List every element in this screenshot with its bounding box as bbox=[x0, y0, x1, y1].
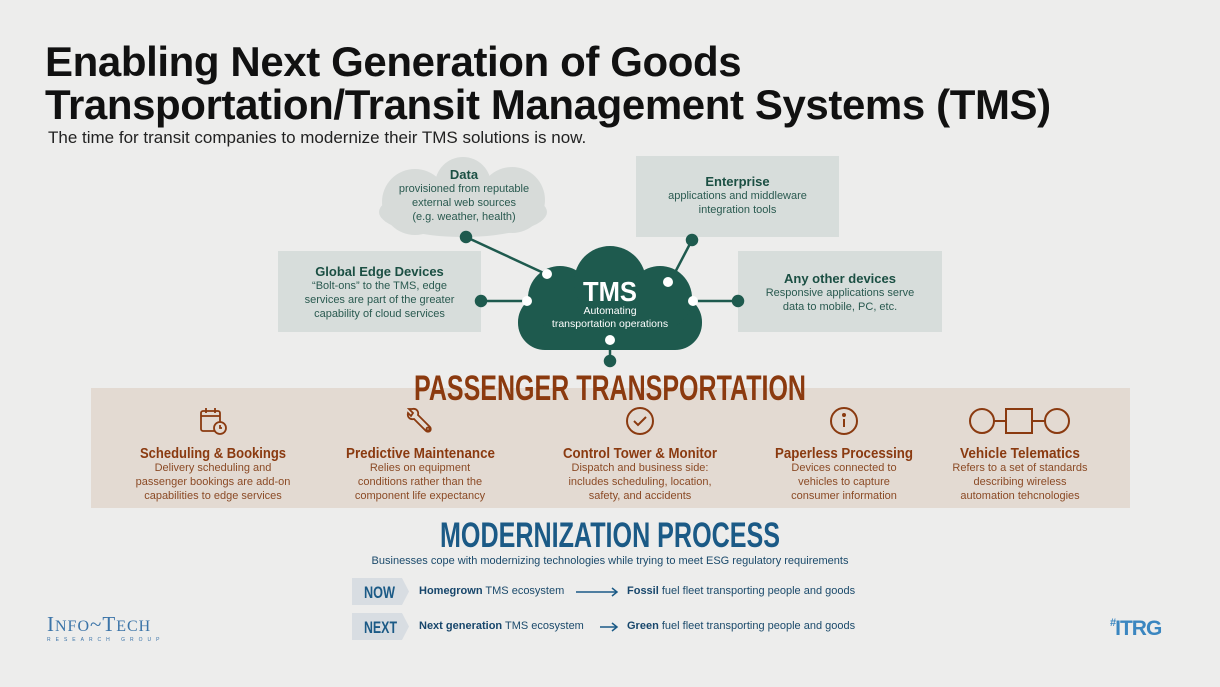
icon: check circle bbox=[626, 407, 654, 435]
text: Data: provisioned from reputable bbox=[399, 183, 529, 195]
column: paperless: consumer information bbox=[791, 490, 897, 502]
row: NEXT bbox=[352, 613, 855, 640]
box: Global Edge Devices: “Bolt-ons” to the TMS, edge bbox=[312, 280, 447, 292]
column: predictive maintenance: component life expectancy bbox=[355, 490, 485, 502]
icon: telematics bbox=[969, 408, 1070, 434]
subtitle: The time for transit companies to modernize their TMS solutions is now. bbox=[48, 128, 586, 147]
box: Global Edge Devices: services are part of the greater bbox=[305, 294, 454, 306]
logo: Info-Tech bbox=[47, 612, 165, 643]
cloud: TMS bbox=[518, 246, 702, 350]
text: Data: Data bbox=[450, 167, 478, 182]
text: Data: (e.g. weather, health) bbox=[412, 211, 516, 223]
box: Any other devices: Responsive applications serve bbox=[766, 287, 914, 299]
row: NOW: NOW bbox=[364, 583, 396, 602]
box: Any other devices: data to mobile, PC, etc. bbox=[783, 301, 897, 313]
box: Global Edge Devices bbox=[278, 251, 481, 332]
box: Global Edge Devices: capability of cloud services bbox=[314, 308, 445, 320]
diagram: TMS hub: TMS bbox=[583, 276, 637, 307]
column: telematics bbox=[952, 408, 1088, 502]
text: Data bbox=[399, 167, 529, 223]
column: telematics: describing wireless bbox=[974, 476, 1066, 488]
icon: wrench bbox=[406, 408, 432, 433]
icon: calendar bbox=[200, 408, 227, 435]
column: telematics: Refers to a set of standards bbox=[952, 462, 1088, 474]
column: predictive maintenance: Relies on equipment bbox=[370, 462, 470, 474]
column: control tower: includes scheduling, location, bbox=[568, 476, 712, 488]
icon: info bbox=[830, 407, 858, 435]
box: Any other devices bbox=[738, 251, 942, 332]
logo: Info-Tech: INFO~TECH bbox=[47, 612, 151, 636]
box: Any other devices: Any other devices bbox=[784, 271, 896, 286]
column: predictive maintenance: conditions rather than the bbox=[358, 476, 482, 488]
title: Transportation/Transit Management Systems (TMS) bbox=[45, 81, 1051, 128]
row: NOW bbox=[352, 578, 855, 605]
column: scheduling bbox=[136, 408, 290, 502]
box: Enterprise: Enterprise bbox=[705, 174, 770, 189]
title bbox=[45, 38, 1051, 128]
box: Enterprise: applications and middleware bbox=[668, 190, 807, 202]
diagram: TMS hub bbox=[379, 157, 744, 368]
column: control tower bbox=[563, 407, 717, 502]
connectors bbox=[461, 232, 743, 366]
box: Enterprise: integration tools bbox=[699, 204, 776, 216]
row: NOW: Homegrown TMS ecosystem bbox=[419, 585, 564, 597]
column: control tower: safety, and accidents bbox=[589, 490, 691, 502]
panel: passenger transportation bbox=[91, 388, 1130, 508]
cloud: Data bbox=[379, 157, 547, 237]
column: paperless: vehicles to capture bbox=[798, 476, 890, 488]
row: NOW: Fossil fuel fleet transporting people and goods bbox=[627, 585, 855, 597]
column: scheduling: passenger bookings are add-on bbox=[136, 476, 290, 488]
title: Enabling Next Generation of Goods bbox=[45, 38, 741, 85]
text: modernization subtitle: Businesses cope with modernizing technologies while trying to meet ESG regulatory requirements bbox=[372, 555, 848, 567]
logo: ITRG: #ITRG bbox=[1110, 617, 1161, 640]
box: Enterprise bbox=[636, 156, 839, 237]
column: scheduling: capabilities to edge services bbox=[144, 490, 282, 502]
row: NEXT: Next generation TMS ecosystem bbox=[419, 620, 584, 632]
box: Global Edge Devices: Global Edge Devices bbox=[315, 264, 444, 279]
row: NEXT: Green fuel fleet transporting people and goods bbox=[627, 620, 855, 632]
column: paperless bbox=[775, 407, 913, 502]
column: predictive maintenance bbox=[346, 408, 494, 502]
column: control tower: Dispatch and business side: bbox=[572, 462, 708, 474]
text: Data: external web sources bbox=[412, 197, 516, 209]
column: telematics: automation tehcnologies bbox=[960, 490, 1080, 502]
diagram: TMS hub: transportation operations bbox=[552, 318, 668, 330]
column: paperless: Devices connected to bbox=[791, 462, 897, 474]
row: NEXT: NEXT bbox=[364, 618, 397, 637]
logo: Info-Tech: RESEARCH GROUP bbox=[47, 637, 165, 643]
column: scheduling: Delivery scheduling and bbox=[155, 462, 271, 474]
diagram: TMS hub: Automating bbox=[583, 305, 637, 317]
